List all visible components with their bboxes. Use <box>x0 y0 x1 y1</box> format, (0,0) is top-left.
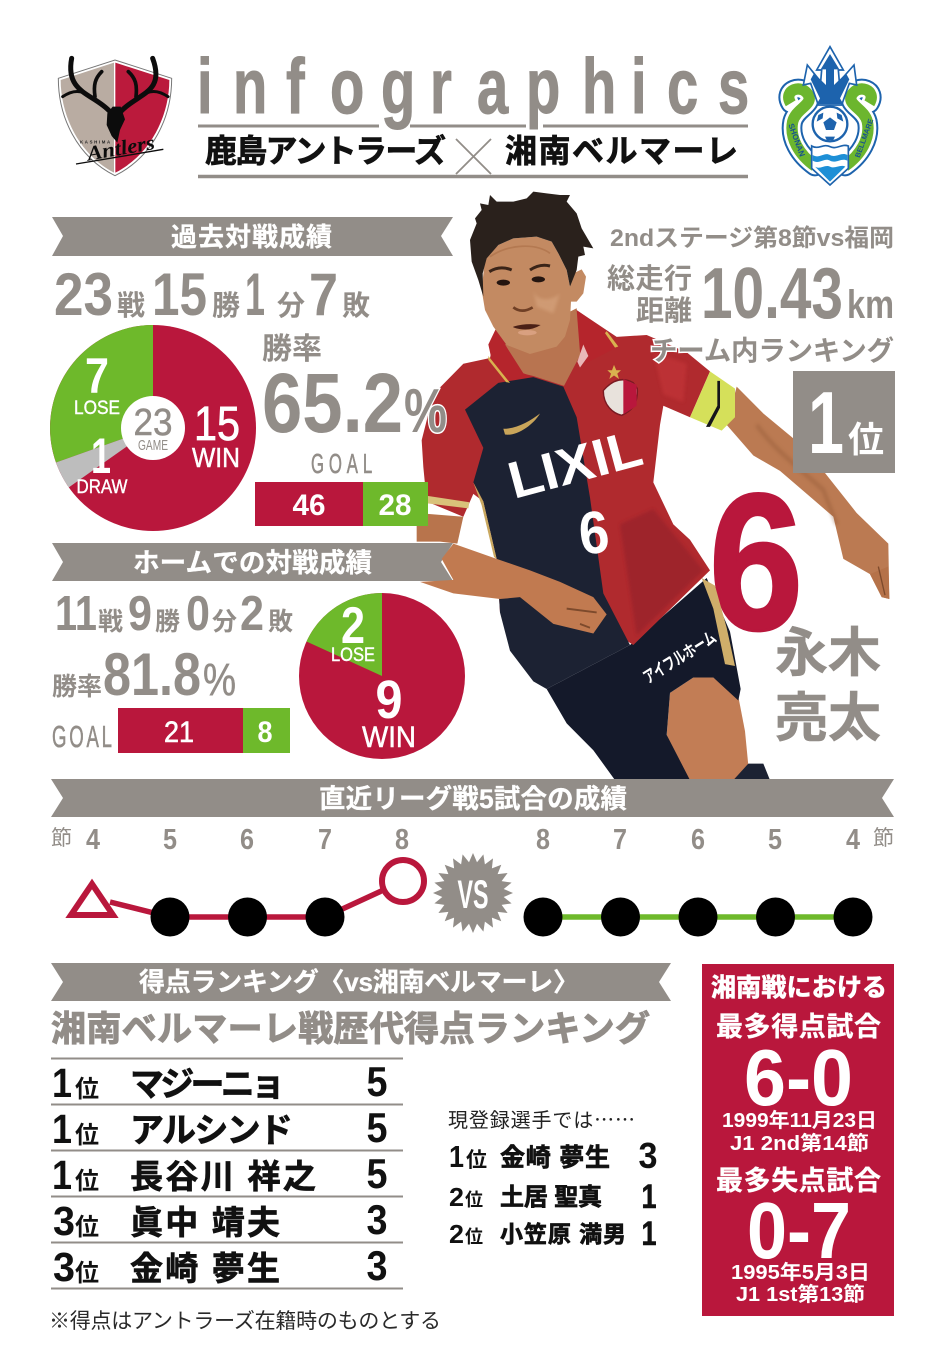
pie chart: overall results: WIN <box>192 442 240 473</box>
match caption: 2ndステージ第8節vs福岡 <box>610 225 894 252</box>
row 3: 5 <box>366 1150 388 1197</box>
home win rate: 勝率 <box>52 673 102 701</box>
pie chart: home results: LOSE <box>331 645 375 666</box>
home goals bar <box>52 708 290 754</box>
pie chart: home results: WIN <box>362 721 416 754</box>
home win rate: % <box>203 654 236 705</box>
squad row 2 <box>449 1178 656 1216</box>
biggest win score: 6-0 <box>744 1033 853 1122</box>
player photo illustration <box>417 192 889 781</box>
rank box: 1 <box>808 373 844 472</box>
distance label <box>607 263 692 326</box>
home goals bar: 21 <box>164 716 194 749</box>
overall record numbers: 7 <box>309 261 338 328</box>
home record numbers: 9 <box>128 587 152 641</box>
panel: player running stats <box>607 225 895 473</box>
overall record numbers: 勝 <box>212 290 240 321</box>
row 5: 3 <box>366 1242 388 1289</box>
matchday labels: 5 <box>768 824 782 856</box>
squad row 3: 2 <box>449 1219 464 1249</box>
row 1: 位 <box>75 1076 99 1103</box>
home record numbers <box>55 587 293 641</box>
player name: 永木 <box>775 624 881 683</box>
banner: last five league matches: 直近リーグ戦5試合の成績 <box>319 784 627 814</box>
shirt sponsor LIXIL: LIXIL <box>502 419 648 511</box>
row 4: 3 <box>366 1196 388 1243</box>
home record numbers: 11 <box>55 587 97 641</box>
row 1 <box>52 1058 388 1106</box>
overall record numbers: 戦 <box>117 290 145 321</box>
matchday labels: 8 <box>395 824 409 856</box>
home goals bar: 8 <box>258 716 272 749</box>
row 1: 5 <box>366 1058 388 1105</box>
matchday labels: 5 <box>163 824 177 856</box>
row 3 <box>52 1150 388 1198</box>
shirt number 6: 6 <box>575 498 612 567</box>
heading: match-up team names: 湘南ベルマーレ <box>505 133 738 169</box>
results timeline: Shonan <box>524 898 872 936</box>
pie chart: home results <box>299 593 465 759</box>
pie chart: home results: 9 <box>376 670 402 730</box>
team ranking label: チーム内ランキング <box>650 335 894 366</box>
jersey number 6: 6 <box>709 454 803 671</box>
row 5: 位 <box>75 1260 99 1287</box>
banner: past head-to-head record <box>52 217 453 256</box>
biggest loss heading: 最多失点試合 <box>716 1166 881 1196</box>
icon: Shonan Bellmare crest: BELLMARE <box>853 117 875 159</box>
panel title: 湘南戦における <box>711 974 887 1002</box>
pie chart: overall results: DRAW <box>76 477 128 498</box>
squad row 3 <box>449 1215 656 1253</box>
biggest win date: J1 2nd第14節 <box>730 1132 869 1155</box>
overall goals bar: GOAL <box>311 448 372 479</box>
squad row 3: 1 <box>642 1215 656 1253</box>
rank box: 位 <box>848 419 884 460</box>
squad row 2: 2 <box>449 1182 464 1212</box>
overall win rate: 65.2 <box>262 356 403 450</box>
VS badge: VS <box>458 873 488 917</box>
row 1: マジーニョ <box>130 1066 285 1104</box>
distance value: 10.43 <box>701 254 843 334</box>
pie chart: overall results: 15 <box>194 398 240 451</box>
banner: past head-to-head record: 過去対戦成績 <box>171 222 332 252</box>
distance label: 距離 <box>636 295 692 326</box>
overall record numbers <box>54 261 370 328</box>
squad row 1: 3 <box>638 1135 658 1176</box>
overall win rate: 勝率 <box>262 333 322 366</box>
footnote: ※得点はアントラーズ在籍時のものとする <box>49 1310 441 1333</box>
VS badge <box>433 853 513 933</box>
panel: biggest wins and losses <box>702 964 894 1316</box>
row 5: 3 <box>53 1244 75 1290</box>
squad row 2: 1 <box>642 1178 656 1216</box>
row 3: 位 <box>75 1168 99 1195</box>
banner: home record <box>52 543 453 581</box>
row 2: アルシンド <box>130 1112 293 1150</box>
home win rate: 81.8 <box>103 641 201 708</box>
squad row 2: 土居 聖真 <box>500 1184 602 1211</box>
matchday labels: 6 <box>240 824 254 856</box>
rank box <box>793 371 895 473</box>
player head <box>470 192 593 354</box>
pie chart: overall results: 7 <box>85 348 109 404</box>
biggest win heading: 最多得点試合 <box>716 1012 881 1042</box>
player name <box>775 624 881 748</box>
pie chart: overall results: 1 <box>91 428 111 484</box>
squad row 1 <box>449 1135 658 1176</box>
heading: all-time ranking: 湘南ベルマーレ戦歴代得点ランキング <box>51 1010 650 1049</box>
distance label: 総走行 <box>607 263 692 294</box>
matchday labels: 4 <box>86 824 100 856</box>
biggest loss date: J1 1st第13節 <box>736 1283 865 1306</box>
home goals bar: GOAL <box>52 720 112 754</box>
results timeline: Kashima <box>71 860 424 936</box>
icon: Kashima Antlers crest <box>58 58 172 176</box>
biggest loss score: 0-7 <box>747 1186 851 1275</box>
icon: Kashima Antlers crest: Antlers <box>83 132 156 166</box>
matchday labels: 6 <box>691 824 705 856</box>
squad row 3: 小笠原 満男 <box>500 1221 626 1247</box>
home record numbers: 0 <box>186 587 210 641</box>
row 3: 1 <box>52 1152 72 1198</box>
home win rate <box>52 641 236 708</box>
row 2: 位 <box>75 1122 99 1149</box>
pie chart: home results: 2 <box>341 597 365 655</box>
shorts sponsor: アイフルホーム <box>640 628 720 687</box>
biggest win date: 1999年11月23日 <box>722 1109 877 1132</box>
table: current squad scorers <box>448 1104 658 1253</box>
squad row 1: 1 <box>449 1139 464 1174</box>
matchday labels: 4 <box>846 824 860 856</box>
overall goals bar <box>255 448 428 526</box>
banner: last five league matches <box>51 779 894 817</box>
pie chart: overall results: LOSE <box>74 398 120 419</box>
matchday labels: 7 <box>613 824 627 856</box>
overall goals bar: 46 <box>292 489 326 522</box>
icon: Shonan Bellmare crest: SHONAN <box>786 122 807 158</box>
title: infographics <box>197 43 749 130</box>
row 2: 1 <box>52 1106 72 1152</box>
heading: match-up team names: 鹿島アントラーズ <box>205 133 446 169</box>
row 5 <box>53 1242 388 1290</box>
matchday labels: 7 <box>318 824 332 856</box>
player name: 亮太 <box>775 689 881 748</box>
row 4: 3 <box>53 1198 75 1244</box>
distance value: km <box>847 283 894 327</box>
squad row 1: 金崎 夢生 <box>500 1144 610 1172</box>
banner: scoring ranking: 得点ランキング〈vs湘南ベルマーレ〉 <box>139 967 579 997</box>
row 1: 1 <box>52 1060 72 1106</box>
matchday labels: 節 <box>873 827 894 850</box>
home record numbers: 2 <box>240 587 264 641</box>
matchday labels: 8 <box>536 824 550 856</box>
panel: home record <box>52 543 465 759</box>
squad row 1: 位 <box>466 1149 487 1172</box>
row 3: 長谷川 祥之 <box>130 1158 316 1195</box>
row 5: 金崎 夢生 <box>130 1250 280 1287</box>
biggest loss date <box>731 1261 870 1306</box>
heading: match-up team names <box>205 133 738 174</box>
pie chart: overall results: GAME <box>138 437 168 454</box>
table: all-time scorers <box>51 1058 403 1290</box>
squad row 3: 位 <box>465 1227 483 1247</box>
icon: Shonan Bellmare crest <box>786 47 875 185</box>
icon: Kashima Antlers crest: KASHIMA <box>80 139 112 144</box>
matchday labels <box>51 824 894 856</box>
pie chart: overall results <box>50 325 256 531</box>
home record numbers: 戦 <box>98 608 123 636</box>
overall goals bar: 28 <box>378 489 412 522</box>
matchday labels: 節 <box>51 827 72 850</box>
squad row 2: 位 <box>465 1190 483 1210</box>
row 4 <box>53 1196 388 1244</box>
pie chart: overall results: 23 <box>134 402 172 444</box>
banner: home record: ホームでの対戦成績 <box>133 548 372 578</box>
biggest loss date: 1995年5月3日 <box>731 1261 870 1284</box>
overall record numbers: 分 <box>277 290 305 321</box>
home record numbers: 勝 <box>155 608 180 636</box>
overall record numbers: 15 <box>152 261 207 328</box>
row 2: 5 <box>366 1104 388 1151</box>
overall record numbers: 23 <box>54 261 113 328</box>
overall record numbers: 敗 <box>342 290 370 321</box>
home record numbers: 敗 <box>268 608 293 636</box>
row 4: 位 <box>75 1214 99 1241</box>
overall record numbers: 1 <box>245 261 265 328</box>
squad caption: 現登録選手では…… <box>448 1104 635 1133</box>
biggest win date <box>722 1109 877 1155</box>
overall win rate: % <box>404 377 447 446</box>
banner: scoring ranking <box>51 963 671 1001</box>
row 4: 眞中 靖夫 <box>130 1204 280 1241</box>
row 2 <box>52 1104 388 1152</box>
home record numbers: 分 <box>212 608 237 636</box>
